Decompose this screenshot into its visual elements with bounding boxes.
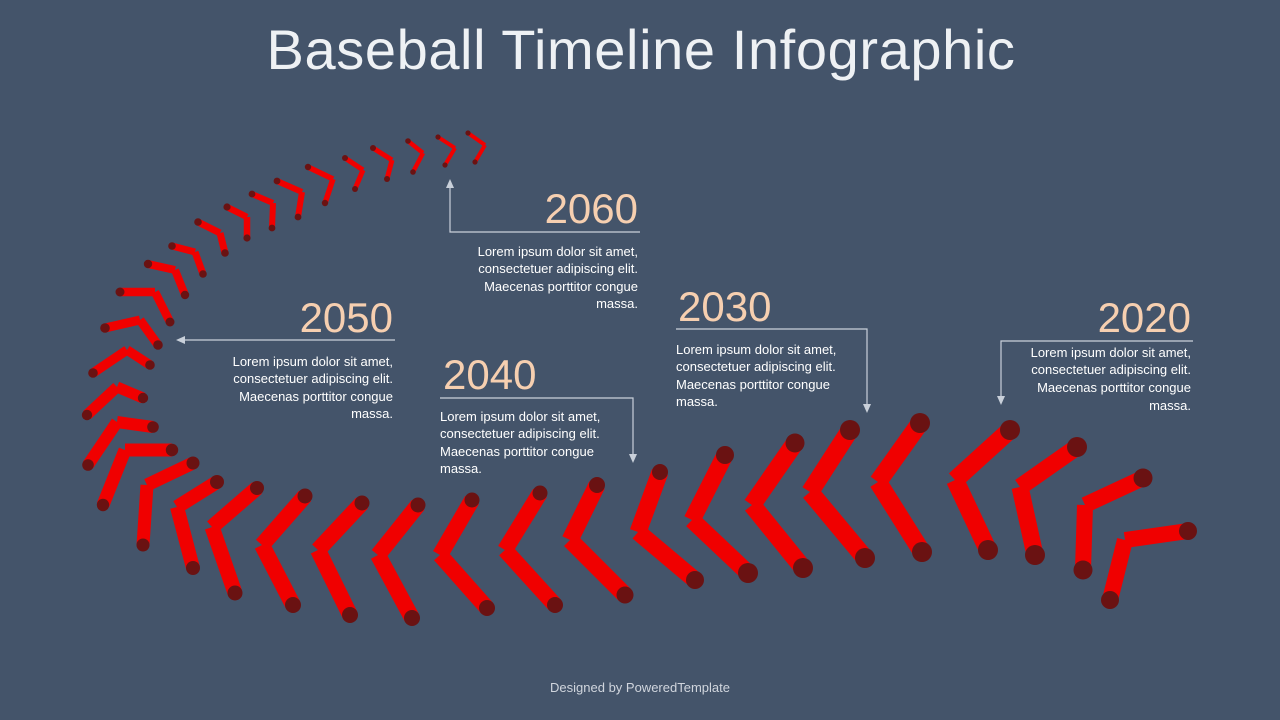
connector arrow 2040 — [440, 398, 637, 463]
milestone: 2060: Maecenas porttitor congue — [484, 279, 638, 294]
milestone: 2050 — [176, 294, 395, 421]
milestone: 2040: consectetuer adipiscing elit. — [440, 426, 600, 441]
milestone: 2060: massa. — [596, 296, 638, 311]
milestone: 2030: 2030 — [678, 283, 771, 330]
footer: Designed by PoweredTemplate — [550, 680, 730, 695]
milestone: 2050: 2050 — [300, 294, 393, 341]
milestone: 2020: massa. — [1149, 398, 1191, 413]
milestone: 2050: Lorem ipsum dolor sit amet, — [233, 354, 393, 369]
milestone: 2020: Lorem ipsum dolor sit amet, — [1031, 345, 1191, 360]
title: Baseball Timeline Infographic — [267, 18, 1015, 81]
milestone: 2030: Maecenas porttitor congue — [676, 377, 830, 392]
milestone: 2040 — [440, 351, 637, 476]
milestone: 2030: Lorem ipsum dolor sit amet, — [676, 342, 836, 357]
milestone: 2040: Maecenas porttitor congue — [440, 444, 594, 459]
milestone: 2050: massa. — [351, 406, 393, 421]
milestone: 2030: massa. — [676, 394, 718, 409]
milestone: 2020 — [997, 294, 1193, 413]
milestone: 2060: 2060 — [545, 185, 638, 232]
milestone: 2020: 2020 — [1098, 294, 1191, 341]
milestone: 2060: consectetuer adipiscing elit. — [478, 261, 638, 276]
connector arrow 2030 — [676, 329, 871, 413]
milestone: 2040: 2040 — [443, 351, 536, 398]
connector arrow 2050 — [176, 336, 395, 344]
connector arrow 2060 — [446, 179, 640, 232]
milestone: 2030: consectetuer adipiscing elit. — [676, 359, 836, 374]
milestone: 2060: Lorem ipsum dolor sit amet, — [478, 244, 638, 259]
milestone: 2040: massa. — [440, 461, 482, 476]
milestone: 2020: consectetuer adipiscing elit. — [1031, 362, 1191, 377]
milestone: 2060 — [446, 179, 640, 311]
baseball seam stitches — [82, 130, 1197, 626]
milestone: 2020: Maecenas porttitor congue — [1037, 380, 1191, 395]
connector arrow 2020 — [997, 341, 1193, 405]
milestone: 2040: Lorem ipsum dolor sit amet, — [440, 409, 600, 424]
milestone: 2050: Maecenas porttitor congue — [239, 389, 393, 404]
milestone: 2050: consectetuer adipiscing elit. — [233, 371, 393, 386]
milestone: 2030 — [676, 283, 871, 413]
